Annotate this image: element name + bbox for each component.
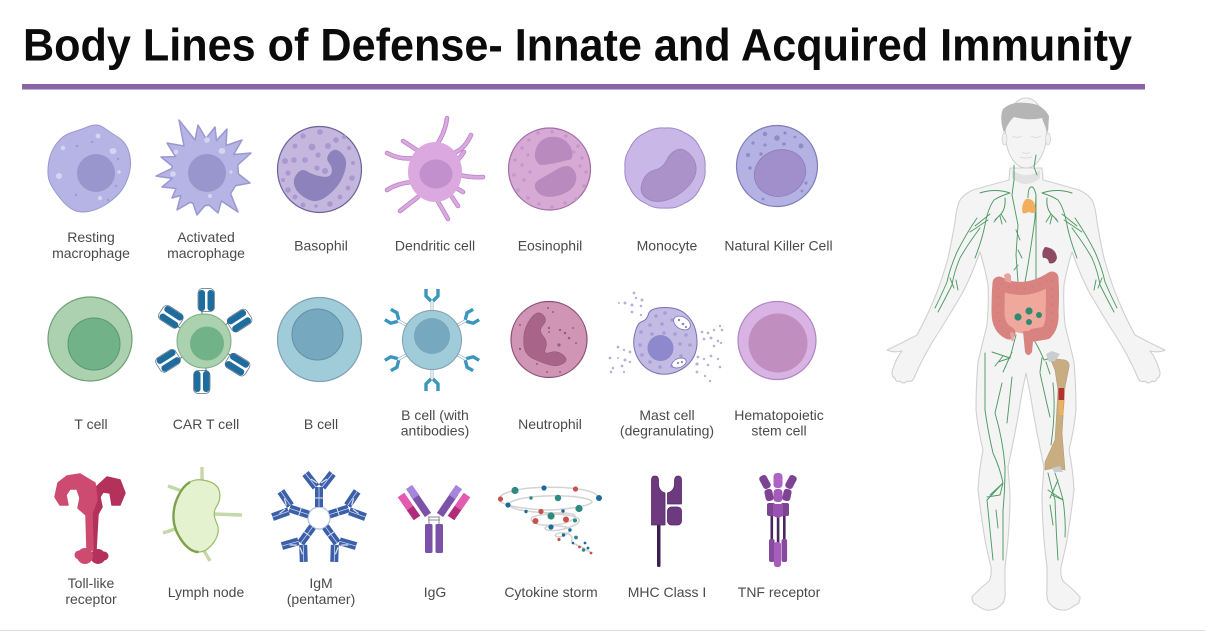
purple title rule: [22, 84, 1145, 90]
human body with lymphatic system: [887, 98, 1165, 610]
icon: neutrophil: [511, 302, 587, 378]
label: macrophage: [167, 245, 245, 261]
icon: eosinophil: [508, 128, 590, 210]
cell: CAR T cell: [154, 288, 254, 432]
label: Neutrophil: [518, 416, 582, 432]
cell: eosinophil: [508, 128, 590, 254]
cell: B cell with antibodies: [385, 289, 479, 438]
label: receptor: [65, 591, 117, 607]
icon: activated macrophage: [156, 120, 251, 215]
icon: natural killer cell: [736, 126, 818, 206]
head and face: [1001, 98, 1050, 168]
label: Toll-like: [68, 575, 115, 591]
label: (pentamer): [287, 591, 355, 607]
cell: B cell: [278, 298, 362, 432]
appendix and stomach: [1004, 273, 1014, 341]
title: Body Lines of Defense- Innate and Acquired Immunity: [23, 20, 1133, 70]
cell: MHC class I: [628, 476, 706, 600]
label: IgM: [309, 575, 333, 591]
icon: B cell: [278, 298, 362, 382]
label: TNF receptor: [738, 584, 821, 600]
cell: IgM pentamer: [273, 474, 365, 607]
cell: toll-like receptor: [55, 474, 125, 607]
thymus: [1022, 199, 1036, 213]
icon: MHC class I: [652, 476, 682, 567]
label: Mast cell: [639, 407, 695, 423]
cell: monocyte: [625, 128, 705, 254]
icon: IgM pentamer: [273, 474, 365, 562]
icon: TNF receptor: [758, 473, 798, 567]
cell: lymph node: [163, 467, 244, 600]
rectum: [1023, 331, 1034, 355]
spleen: [1042, 247, 1057, 263]
label: Hematopoietic: [734, 407, 824, 423]
icon: T cell: [48, 297, 132, 381]
icon: monocyte: [625, 128, 705, 208]
label: Monocyte: [637, 238, 698, 254]
label: (degranulating): [620, 422, 714, 438]
label: Eosinophil: [518, 238, 582, 254]
body silhouette: [887, 168, 1165, 610]
icon: basophil: [278, 126, 362, 212]
cell: IgG: [401, 487, 467, 600]
icon: mast cell: [609, 292, 723, 382]
label: B cell (with: [401, 407, 469, 423]
lymphatic vessels: [935, 155, 1117, 560]
label: B cell: [304, 416, 338, 432]
label: Activated: [177, 229, 235, 245]
label: Lymph node: [168, 584, 244, 600]
icon: hematopoietic stem cell: [738, 302, 816, 380]
cell: dendritic cell: [387, 118, 483, 254]
cell: activated macrophage: [156, 120, 251, 261]
icon: cytokine storm: [498, 485, 602, 554]
label: Natural Killer Cell: [724, 238, 833, 254]
neck shadow: [1012, 170, 1040, 184]
icon: CAR T cell: [154, 288, 254, 394]
label: stem cell: [751, 422, 807, 438]
label: CAR T cell: [173, 416, 239, 432]
label: Cytokine storm: [504, 584, 598, 600]
icon: B cell with antibodies: [385, 289, 479, 391]
cell: mast cell: [609, 292, 723, 438]
cell: natural killer cell: [724, 126, 833, 254]
cell: cytokine storm: [498, 485, 602, 600]
label: Resting: [67, 229, 115, 245]
label: antibodies): [401, 422, 469, 438]
label: Dendritic cell: [395, 238, 475, 254]
small intestine: [1003, 284, 1050, 334]
cell: TNF receptor: [738, 473, 821, 600]
icon: toll-like receptor: [55, 474, 125, 564]
label: MHC Class I: [628, 584, 706, 600]
cell: hematopoietic stem cell: [734, 302, 824, 438]
cell: T cell: [48, 297, 132, 432]
icon: IgG: [401, 487, 467, 553]
cell: resting macrophage: [48, 125, 131, 261]
label: macrophage: [52, 245, 130, 261]
cell: basophil: [278, 126, 362, 254]
label: T cell: [74, 416, 108, 432]
cell: neutrophil: [511, 302, 587, 432]
icon: resting macrophage: [48, 125, 131, 212]
intestinal lymph nodes: [1014, 307, 1042, 325]
icon: dendritic cell: [387, 118, 483, 219]
icon: lymph node: [163, 467, 242, 561]
colon: [998, 278, 1052, 335]
label: Basophil: [294, 238, 348, 254]
femur bone: [1045, 351, 1069, 472]
bottom border: [0, 630, 1205, 631]
label: IgG: [424, 584, 446, 600]
